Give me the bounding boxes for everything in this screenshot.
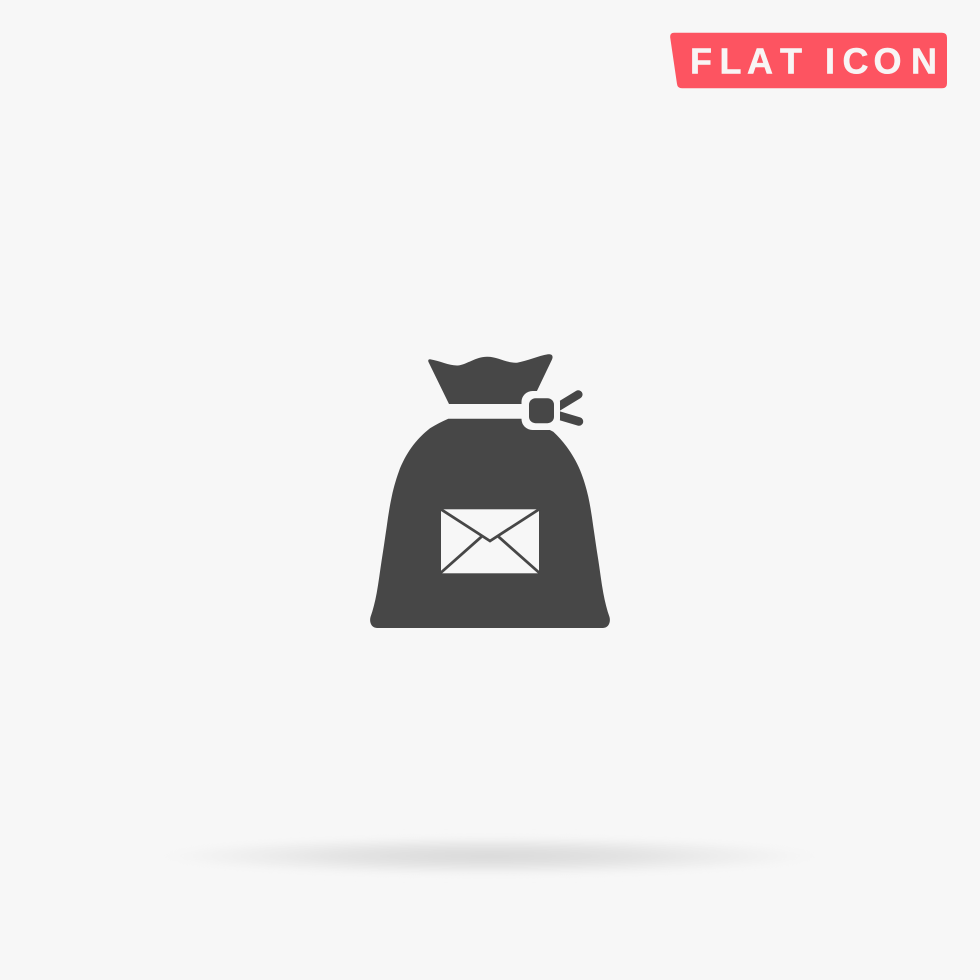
icon: mail sack	[370, 354, 610, 628]
ground shadow	[160, 836, 820, 876]
badge: flat icon label: FLATICON	[690, 40, 937, 81]
sack body	[370, 419, 610, 628]
knot cutout ring	[522, 391, 560, 430]
sack top ruffle	[428, 354, 553, 404]
badge: flat icon label	[670, 33, 947, 88]
envelope	[440, 509, 540, 573]
knot	[529, 398, 554, 423]
tie ends	[552, 394, 579, 422]
